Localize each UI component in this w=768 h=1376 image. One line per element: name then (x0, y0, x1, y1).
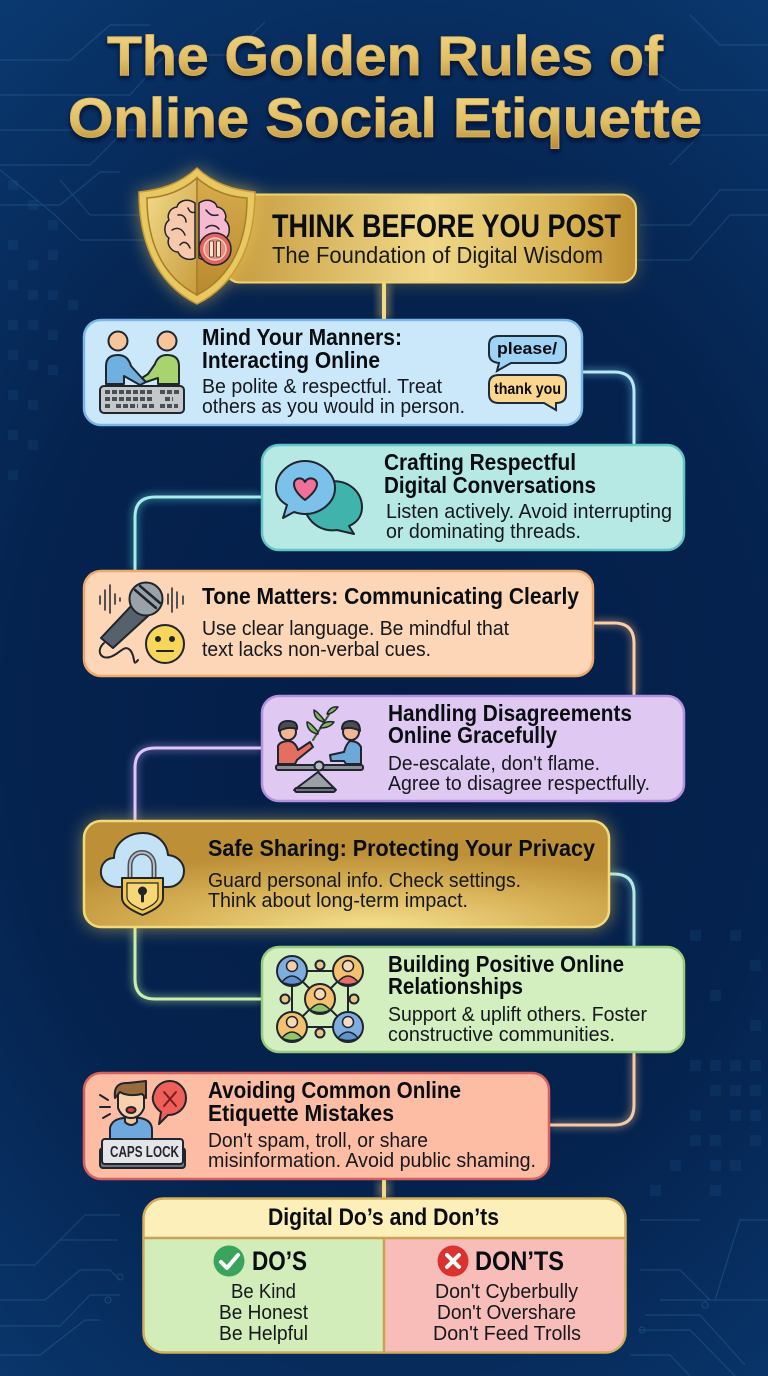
panel: mind your manners: others as you would in person. (202, 395, 465, 418)
column: don'ts: DON’TS (475, 1246, 564, 1276)
panel: tone matters: text lacks non-verbal cues. (202, 638, 431, 661)
speech bubble: please: please/ (497, 340, 557, 358)
banner subheading: The Foundation of Digital Wisdom (272, 242, 603, 268)
panel: mind your manners: Interacting Online (202, 347, 380, 373)
column: don'ts (433, 1246, 581, 1345)
heading: Handling Disagreements (388, 700, 632, 726)
banner: think before you post (225, 194, 637, 283)
connector: card 7 to do's and don'ts (378, 1180, 390, 1198)
panel: handling disagreements: Online Gracefully (388, 722, 557, 748)
connector: card 5 to card 6 (left) (135, 928, 261, 999)
column: don'ts: Don't Feed Trolls (433, 1322, 581, 1345)
panel: mind your manners (84, 320, 582, 425)
connector: card 2 to card 3 (135, 497, 261, 570)
heading: Mind Your Manners: (202, 324, 402, 350)
column: do's: Be Honest (219, 1301, 308, 1324)
panel: digital do's and don'ts (144, 1198, 626, 1352)
panel: avoiding common mistakes (84, 1073, 549, 1179)
panel: building positive relationships (262, 947, 684, 1052)
connector: banner to card 1 (378, 283, 390, 319)
panel: tone matters (84, 571, 593, 676)
title: The Golden Rules of (107, 24, 663, 87)
heading: Crafting Respectful (384, 449, 576, 475)
speech bubble: thank you: thank you (494, 381, 561, 398)
connector: card 5 to card 6 (right) (610, 874, 634, 946)
panel: crafting respectful conversations: or dominating threads. (386, 520, 581, 543)
heading: Avoiding Common Online (208, 1077, 461, 1103)
icon: green check (214, 1246, 244, 1276)
pause button (199, 233, 231, 265)
panel: avoiding common mistakes: misinformation. Avoid public shaming. (208, 1149, 536, 1172)
icon: microphone with sound waves and neutral face (100, 582, 184, 663)
column: don'ts: Don't Overshare (437, 1301, 576, 1324)
body text: Support & uplift others. Foster (388, 1003, 647, 1026)
column: do's: DO’S (252, 1246, 307, 1276)
panel: crafting respectful conversations (262, 445, 684, 550)
icon: cloud and padlock (101, 833, 184, 915)
icon: shield with brain and pause (139, 168, 255, 304)
title: Online Social Etiquette (68, 86, 702, 149)
panel: building positive relationships: constructive communities. (388, 1023, 615, 1046)
panel: safe sharing (84, 821, 610, 928)
icon: connected people network (277, 956, 363, 1042)
brain (165, 200, 229, 259)
icon: red cross (438, 1246, 468, 1276)
body text: Be polite & respectful. Treat (202, 375, 442, 398)
body text: Don't spam, troll, or share (208, 1129, 428, 1152)
panel: building positive relationships: Relationships (388, 973, 523, 999)
body text: Guard personal info. Check settings. (208, 869, 521, 892)
speech bubble: please (489, 336, 566, 371)
icon: shouting person with caps lock key (100, 1081, 186, 1168)
icon: chat bubbles with heart (276, 461, 362, 534)
connector: card 1 to card 2 (582, 372, 634, 444)
heading: Building Positive Online (388, 951, 624, 977)
panel: avoiding common mistakes: Etiquette Mistakes (208, 1100, 394, 1126)
body text: Listen actively. Avoid interrupting (386, 500, 672, 523)
title (68, 24, 702, 149)
panel: handling disagreements (262, 696, 684, 801)
panel: crafting respectful conversations: Digital Conversations (384, 472, 596, 498)
body text: Use clear language. Be mindful that (202, 617, 509, 640)
column: do's (214, 1246, 308, 1345)
heading: Safe Sharing: Protecting Your Privacy (208, 835, 595, 861)
panel: handling disagreements: Agree to disagree respectfully. (388, 772, 650, 795)
column: do's: Be Kind (231, 1280, 296, 1303)
banner heading: THINK BEFORE YOU POST (272, 208, 621, 244)
panel: safe sharing: Think about long-term impact. (208, 889, 468, 912)
body text: De-escalate, don't flame. (388, 752, 600, 775)
column: do's: Be Helpful (219, 1322, 308, 1345)
heading: Tone Matters: Communicating Clearly (202, 583, 579, 609)
connector: card 4 to card 5 (135, 748, 261, 820)
speech bubble: thank you (489, 375, 566, 410)
connector: card 6 to card 7 (550, 1053, 634, 1125)
connector: card 3 to card 4 (594, 623, 634, 695)
icon: two people on balance with olive branch (276, 707, 363, 792)
icon label: caps lock: CAPS LOCK (110, 1144, 179, 1161)
icon: handshake at keyboard (100, 332, 184, 413)
column: don'ts: Don't Cyberbully (435, 1280, 579, 1303)
heading: Digital Do’s and Don’ts (268, 1204, 499, 1231)
